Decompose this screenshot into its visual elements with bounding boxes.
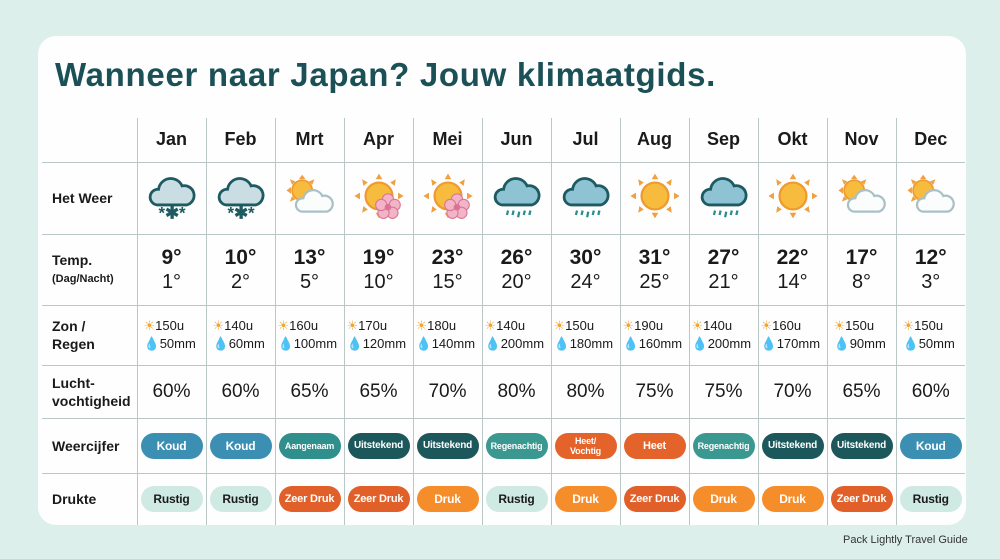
climate table: 8° xyxy=(852,270,871,292)
climate table: 1° xyxy=(162,270,181,292)
climate table: 💧140mm xyxy=(416,336,475,351)
climate table: 17° xyxy=(846,246,877,268)
title: Wanneer naar Japan? Jouw klimaatgids. xyxy=(55,56,716,93)
climate table: Uitstekend xyxy=(354,440,403,450)
climate table: 80% xyxy=(497,380,536,402)
climate table: *✱* xyxy=(158,203,186,222)
climate table: 10° xyxy=(225,246,256,268)
climate table: Okt xyxy=(777,129,808,149)
climate table: Regen xyxy=(52,336,95,352)
climate table: (Dag/Nacht) xyxy=(52,272,114,284)
climate table: Druk xyxy=(779,492,806,506)
climate table: Druk xyxy=(572,492,599,506)
climate table: 15° xyxy=(432,270,463,292)
climate table: Aangenaam xyxy=(285,440,334,450)
climate table: 💧60mm xyxy=(212,336,265,351)
climate table xyxy=(42,118,965,525)
climate table: Rustig xyxy=(222,492,259,506)
climate table: Uitstekend xyxy=(768,440,817,450)
climate table: 💧120mm xyxy=(346,336,406,351)
climate table: Koud xyxy=(226,438,255,452)
climate table: Nov xyxy=(844,129,878,149)
climate table: Weercijfer xyxy=(52,438,119,454)
climate table: 65% xyxy=(842,380,881,402)
climate table: Koud xyxy=(916,438,946,452)
climate table: Regenachtig xyxy=(491,440,542,450)
climate table: 14° xyxy=(777,270,808,292)
climate table: 💧180mm xyxy=(554,336,613,351)
climate table: 65% xyxy=(290,380,329,402)
climate table: Jan xyxy=(156,129,187,149)
climate table: Zeer Druk xyxy=(354,493,403,505)
climate table: Aug xyxy=(637,129,672,149)
climate table: 22° xyxy=(777,246,808,268)
climate table: Zeer Druk xyxy=(837,493,886,505)
climate table: 31° xyxy=(639,246,670,268)
climate table: 75% xyxy=(635,380,674,402)
climate table: Temp. xyxy=(52,252,92,268)
climate table: 2° xyxy=(231,270,250,292)
climate table: Regenachtig xyxy=(698,440,749,450)
climate table: Jun xyxy=(500,129,532,149)
climate table: Lucht- xyxy=(52,374,95,390)
climate table: 3° xyxy=(921,270,940,292)
climate table: Sep xyxy=(707,129,740,149)
climate table: Heet/ xyxy=(575,436,596,446)
climate table: 60% xyxy=(152,380,191,402)
climate table: 75% xyxy=(704,380,743,402)
climate table: 9° xyxy=(161,246,182,268)
climate table: Mei xyxy=(432,129,462,149)
climate table: ☀140u xyxy=(212,318,253,333)
climate table: 30° xyxy=(570,246,601,268)
climate table: 13° xyxy=(294,246,325,268)
climate table: 💧50mm xyxy=(902,336,955,351)
climate table: Rustig xyxy=(913,492,949,506)
climate table: 24° xyxy=(570,270,601,292)
climate table: 70% xyxy=(428,380,467,402)
climate table: 💧100mm xyxy=(278,336,337,351)
climate table: ☀140u xyxy=(484,318,525,333)
climate table: 💧90mm xyxy=(834,336,886,351)
climate table: 19° xyxy=(363,246,394,268)
climate table: 💧170mm xyxy=(760,336,820,351)
climate table: Het Weer xyxy=(52,190,112,206)
climate table: 23° xyxy=(432,246,463,268)
climate table: 26° xyxy=(501,246,532,268)
climate table: 20° xyxy=(501,270,532,292)
climate table: 💧160mm xyxy=(622,336,682,351)
climate table: ☀140u xyxy=(692,318,732,333)
climate table: Koud xyxy=(157,438,186,452)
climate table: Rustig xyxy=(153,492,190,506)
climate table: *✱* xyxy=(227,203,255,222)
climate table: vochtigheid xyxy=(52,392,131,408)
climate table: Uitstekend xyxy=(837,440,886,450)
climate table: 💧200mm xyxy=(484,336,544,351)
climate table: ☀170u xyxy=(346,318,387,333)
climate table: ☀150u xyxy=(834,318,874,333)
climate table: Zon / xyxy=(52,318,85,334)
climate table: ☀160u xyxy=(278,318,318,333)
climate table: 70% xyxy=(773,380,812,402)
climate table: Uitstekend xyxy=(423,440,472,450)
climate table: ☀150u xyxy=(902,318,943,333)
climate table: 21° xyxy=(708,270,739,292)
climate table: ☀180u xyxy=(416,318,456,333)
climate table: 80% xyxy=(566,380,605,402)
climate table: Dec xyxy=(914,129,947,149)
climate table: 27° xyxy=(708,246,739,268)
climate table: Heet xyxy=(643,440,666,452)
climate table: Apr xyxy=(363,129,394,149)
climate table: Jul xyxy=(572,129,598,149)
climate table: 12° xyxy=(915,246,947,268)
climate table: 60% xyxy=(912,380,950,402)
climate table: 60% xyxy=(221,380,260,402)
climate table: Zeer Druk xyxy=(285,493,334,505)
climate table: Feb xyxy=(224,129,256,149)
climate table: 65% xyxy=(359,380,398,402)
climate table: 💧200mm xyxy=(692,336,751,351)
climate table: ☀190u xyxy=(622,318,663,333)
climate table: ☀150u xyxy=(554,318,594,333)
footer credit: Pack Lightly Travel Guide xyxy=(843,534,968,546)
climate table: ☀160u xyxy=(760,318,801,333)
climate table: Drukte xyxy=(52,491,96,507)
climate table: Vochtig xyxy=(570,446,601,456)
climate table: Mrt xyxy=(296,129,324,149)
climate table: ☀150u xyxy=(144,318,184,333)
climate table: Zeer Druk xyxy=(630,493,679,505)
climate table: Rustig xyxy=(498,492,535,506)
climate table: 5° xyxy=(300,270,319,292)
climate table: Druk xyxy=(434,492,461,506)
climate table: 💧50mm xyxy=(144,336,196,351)
climate table: Druk xyxy=(710,492,737,506)
climate table: 10° xyxy=(363,270,394,292)
climate table: 25° xyxy=(639,270,670,292)
